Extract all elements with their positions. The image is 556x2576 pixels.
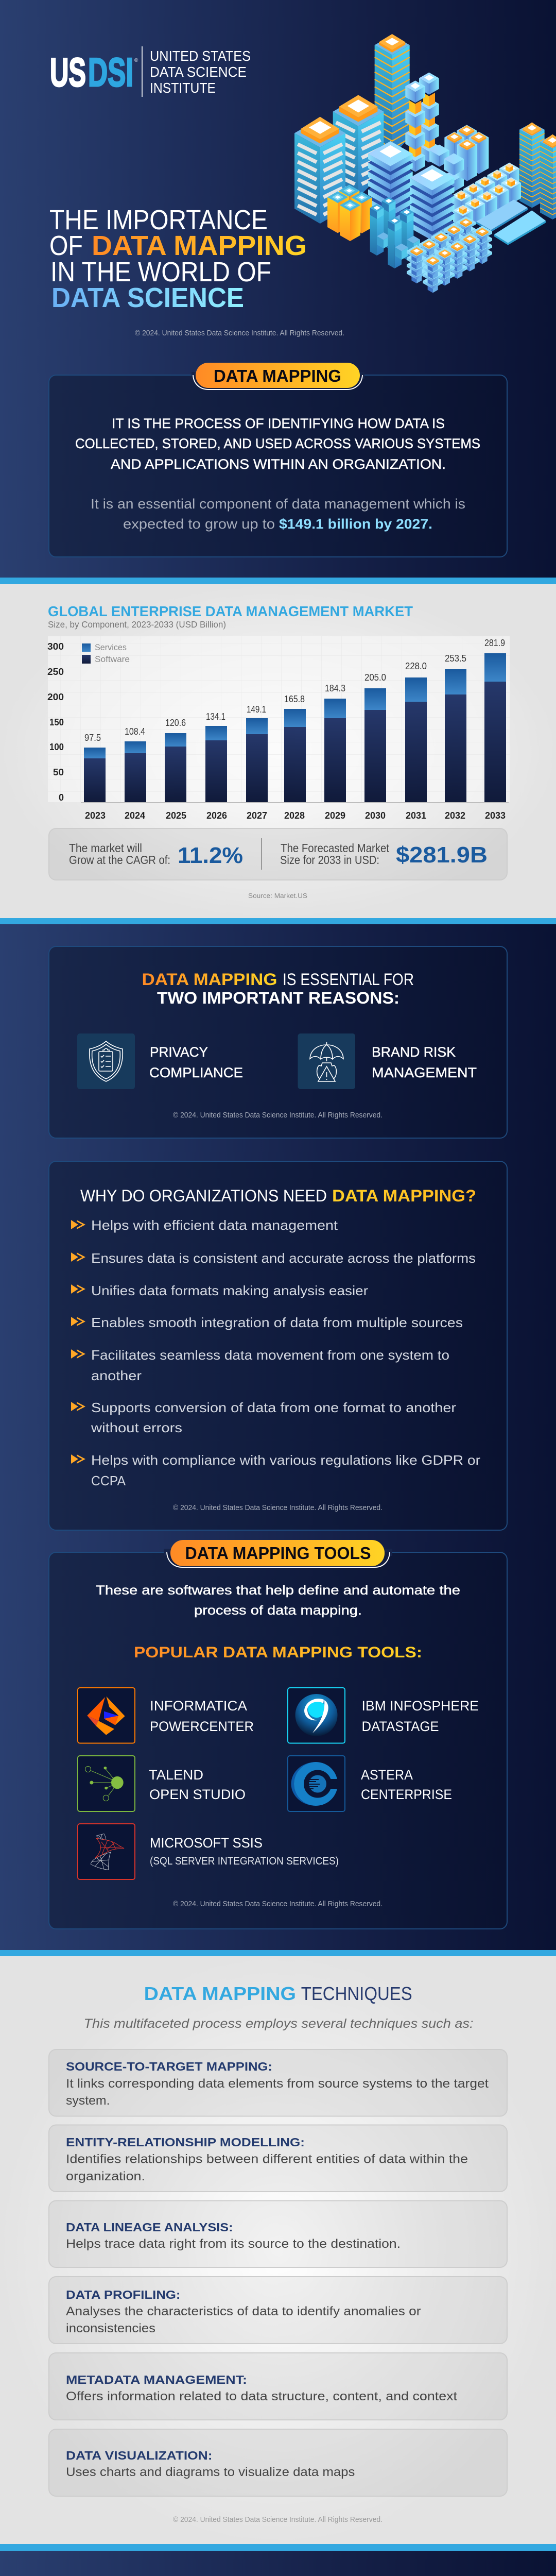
icon: ibm infosphere — [288, 1688, 345, 1743]
bar values: 205.0 — [364, 672, 386, 683]
right twin towers — [519, 122, 556, 219]
icon: astera — [288, 1756, 345, 1811]
market growth text: $149.1 billion by 2027. — [279, 516, 432, 532]
year labels: 2026 — [206, 810, 227, 821]
tall striped tower — [375, 34, 410, 156]
market growth text — [91, 496, 465, 532]
subheading: This multifaceted process employs several techniques such as: — [83, 2016, 474, 2031]
y axis labels: 250 — [47, 667, 64, 677]
stacked discs with orange roofs — [407, 216, 492, 293]
year labels — [85, 810, 506, 821]
y axis labels: 50 — [53, 767, 64, 777]
definition text: AND APPLICATIONS WITHIN AN ORGANIZATION. — [111, 456, 446, 472]
title: IN THE WORLD OF — [50, 257, 271, 287]
bar values: 228.0 — [405, 661, 427, 671]
card: data visualization — [49, 2429, 507, 2496]
intro text: process of data mapping. — [194, 1603, 362, 1618]
copyright: © 2024. United States Data Science Institute. All Rights Reserved. — [173, 1900, 383, 1908]
bar values: 281.9 — [484, 638, 505, 648]
stats box: $281.9B — [396, 842, 488, 868]
panel: two important reasons — [49, 946, 507, 1138]
copyright: © 2024. United States Data Science Institute. All Rights Reserved. — [173, 1111, 383, 1120]
panel: data mapping tools — [49, 1540, 507, 1929]
card: entity-relationship modelling: organization. — [66, 2170, 145, 2183]
card: entity-relationship modelling: Identifies relationships between different entities of data within the — [66, 2153, 468, 2166]
y axis labels: 300 — [47, 641, 64, 652]
intro text: These are softwares that help define and automate the — [96, 1583, 460, 1598]
card: metadata management: Offers information related to data structure, content, and context — [66, 2389, 457, 2403]
chart heading: GLOBAL ENTERPRISE DATA MANAGEMENT MARKET — [48, 603, 413, 619]
card: source-to-target mapping: It links corresponding data elements from source systems to the target — [66, 2077, 489, 2091]
icon: informatica — [78, 1688, 135, 1743]
illustration: isometric data city — [294, 34, 556, 293]
list items: another — [91, 1368, 142, 1383]
list items: Enables smooth integration of data from multiple sources — [91, 1315, 463, 1330]
legend — [82, 642, 130, 664]
text: brand risk management — [372, 1044, 477, 1080]
y axis labels: 100 — [49, 742, 64, 752]
heading — [142, 970, 414, 1007]
panel: why organizations need data mapping — [49, 1161, 507, 1530]
logo: USDSI: ® — [134, 58, 138, 63]
title: DATA MAPPING — [92, 230, 307, 261]
text: astera centerprise: CENTERPRISE — [361, 1787, 452, 1802]
pill heading: tools: DATA MAPPING TOOLS — [185, 1544, 371, 1563]
tile grid with orange cubes — [451, 163, 521, 231]
pill heading: data mapping: DATA MAPPING — [214, 366, 341, 385]
year labels: 2032 — [445, 810, 465, 821]
building with white stripes, front — [294, 117, 345, 224]
text: informatica powercenter: INFORMATICA — [150, 1698, 247, 1714]
layered tower, front — [410, 165, 455, 241]
market growth text: expected to grow up to — [123, 516, 275, 532]
logo: USDSI: DATA SCIENCE — [150, 64, 247, 80]
card: data profiling: Analyses the characteristics of data to identify anomalies or — [66, 2304, 421, 2318]
list items: Helps with compliance with various regulations like GDPR or — [91, 1452, 480, 1468]
chart heading — [48, 603, 413, 630]
card: data profiling — [49, 2277, 507, 2344]
bar values: 120.6 — [165, 718, 186, 728]
definition text — [75, 416, 480, 472]
copyright: © 2024. United States Data Science Institute. All Rights Reserved. — [173, 2516, 383, 2524]
copyright: © 2024. United States Data Science Institute. All Rights Reserved. — [135, 329, 344, 337]
text: talend open studio: TALEND — [149, 1767, 203, 1783]
text: astera centerprise — [361, 1767, 452, 1802]
stats box: Grow at the CAGR of: — [69, 853, 170, 867]
title: THE IMPORTANCE — [49, 205, 268, 235]
text: ibm infosphere datastage: DATASTAGE — [361, 1719, 439, 1734]
text: brand risk management: BRAND RISK — [372, 1044, 456, 1060]
text: privacy compliance: PRIVACY — [150, 1044, 208, 1060]
text: informatica powercenter: POWERCENTER — [150, 1719, 254, 1734]
list items: Helps with efficient data management — [91, 1217, 338, 1233]
market growth text: It is an essential component of data management which is — [91, 496, 465, 512]
icon: shield checklist — [77, 1033, 135, 1089]
heading: TWO IMPORTANT REASONS: — [157, 989, 399, 1007]
year labels: 2024 — [125, 810, 145, 821]
orange blocks — [327, 185, 372, 241]
heading: TECHNIQUES — [301, 1983, 412, 2004]
panel: what is data mapping — [49, 363, 507, 557]
pill heading: tools — [164, 1540, 392, 1567]
text: informatica powercenter — [150, 1698, 254, 1734]
card: data lineage analysis — [49, 2201, 507, 2267]
heading: DATA MAPPING — [142, 970, 277, 989]
bar values: 165.8 — [284, 694, 305, 704]
panel: data mapping techniques — [0, 1950, 556, 2551]
definition text: IT IS THE PROCESS OF IDENTIFYING HOW DATA IS — [112, 416, 445, 431]
bar chart — [47, 636, 510, 821]
flat slabs — [476, 199, 546, 245]
heading — [144, 1983, 412, 2004]
bar values: 108.4 — [125, 726, 145, 737]
text: microsoft ssis: (SQL SERVER INTEGRATION SERVICES) — [150, 1855, 339, 1867]
intro text — [96, 1583, 460, 1618]
heading: WHY DO ORGANIZATIONS NEED — [80, 1187, 327, 1205]
list items: Ensures data is consistent and accurate across the platforms — [91, 1250, 476, 1266]
card: source-to-target mapping — [49, 2049, 507, 2116]
stats box — [49, 828, 507, 880]
heading: DATA MAPPING — [144, 1983, 296, 2004]
card: data lineage analysis: DATA LINEAGE ANALYSIS: — [66, 2221, 233, 2234]
title — [49, 205, 307, 313]
list items: Facilitates seamless data movement from one system to — [91, 1347, 449, 1363]
software bars — [84, 682, 506, 802]
icon: microsoft ssis — [78, 1824, 135, 1879]
heading: IS ESSENTIAL FOR — [283, 970, 414, 989]
heading: DATA MAPPING? — [332, 1187, 476, 1205]
pill heading: data mapping — [192, 363, 364, 389]
layered tower, back — [368, 141, 413, 225]
y axis labels: 150 — [49, 717, 64, 727]
panel: market chart section — [0, 578, 556, 924]
title: OF — [49, 230, 83, 261]
text: privacy compliance: COMPLIANCE — [149, 1065, 243, 1080]
teal pillars — [370, 197, 420, 268]
text: microsoft ssis — [150, 1835, 339, 1867]
small cubes and rooftop blocks — [429, 125, 489, 192]
year labels: 2027 — [247, 810, 267, 821]
logo: USDSI: US — [50, 49, 86, 95]
list items: Supports conversion of data from one format to another — [91, 1400, 456, 1415]
text: talend open studio — [149, 1767, 246, 1802]
legend: Services — [95, 642, 127, 652]
card: data profiling: inconsistencies — [66, 2321, 155, 2335]
logo: USDSI: DSI — [88, 49, 133, 95]
text: microsoft ssis: MICROSOFT SSIS — [150, 1835, 263, 1851]
logo: USDSI — [50, 46, 251, 97]
icon: umbrella over gear — [298, 1033, 355, 1089]
stats box: Size for 2033 in USD: — [280, 853, 379, 867]
list items: Unifies data formats making analysis easier — [91, 1283, 368, 1298]
stats box: The Forecasted Market — [281, 841, 390, 855]
bar values: 253.5 — [445, 653, 466, 664]
logo: USDSI: UNITED STATES — [150, 48, 251, 64]
card: source-to-target mapping: system. — [66, 2094, 110, 2108]
source note: Source: Market.US — [248, 892, 307, 900]
card: data visualization: DATA VISUALIZATION: — [66, 2449, 212, 2462]
text: brand risk management: MANAGEMENT — [372, 1065, 477, 1080]
stats box: The market will — [69, 841, 142, 855]
year labels: 2030 — [365, 810, 386, 821]
text: ibm infosphere datastage — [361, 1698, 479, 1734]
card: metadata management: METADATA MANAGEMENT: — [66, 2373, 247, 2386]
services bars — [84, 653, 506, 758]
card: entity-relationship modelling: ENTITY-RELATIONSHIP MODELLING: — [66, 2136, 305, 2149]
card: data profiling: DATA PROFILING: — [66, 2288, 180, 2301]
y axis labels: 200 — [47, 692, 64, 702]
stats box: 11.2% — [178, 843, 243, 868]
card: entity-relationship modelling — [49, 2125, 507, 2192]
icon: talend — [78, 1756, 135, 1811]
text: astera centerprise: ASTERA — [361, 1767, 413, 1783]
year labels: 2023 — [85, 810, 106, 821]
card: metadata management — [49, 2353, 507, 2420]
definition text: COLLECTED, STORED, AND USED ACROSS VARIOUS SYSTEMS — [75, 436, 480, 451]
y axis labels — [47, 641, 64, 803]
year labels: 2031 — [406, 810, 426, 821]
chart heading: Size, by Component, 2023-2033 (USD Billion) — [48, 619, 226, 630]
year labels: 2025 — [166, 810, 186, 821]
year labels: 2028 — [284, 810, 305, 821]
heading — [80, 1187, 476, 1205]
legend: Software — [95, 654, 130, 664]
year labels: 2029 — [325, 810, 345, 821]
card: data visualization: Uses charts and diagrams to visualize data maps — [66, 2465, 355, 2479]
card: source-to-target mapping: SOURCE-TO-TARGET MAPPING: — [66, 2060, 272, 2073]
text: talend open studio: OPEN STUDIO — [149, 1787, 246, 1802]
list items: CCPA — [91, 1473, 126, 1488]
list items — [71, 1217, 480, 1488]
sub heading: POPULAR DATA MAPPING TOOLS: — [134, 1644, 422, 1661]
list items: without errors — [91, 1420, 182, 1435]
title: DATA SCIENCE — [51, 282, 244, 313]
building with white stripes, back — [333, 95, 384, 197]
y axis labels: 0 — [59, 792, 64, 803]
bar values: 149.1 — [247, 704, 266, 715]
bar values: 184.3 — [325, 683, 345, 693]
text: ibm infosphere datastage: IBM INFOSPHERE — [361, 1698, 479, 1714]
text: privacy compliance — [149, 1044, 243, 1080]
year labels: 2033 — [485, 810, 506, 821]
bar values — [84, 638, 505, 743]
card: data lineage analysis: Helps trace data right from its source to the destination. — [66, 2237, 401, 2251]
copyright: © 2024. United States Data Science Institute. All Rights Reserved. — [173, 1504, 383, 1512]
bar values: 134.1 — [206, 711, 225, 722]
bar values: 97.5 — [84, 733, 101, 743]
logo: USDSI: INSTITUTE — [150, 80, 216, 96]
stacked cube columns — [405, 73, 439, 172]
